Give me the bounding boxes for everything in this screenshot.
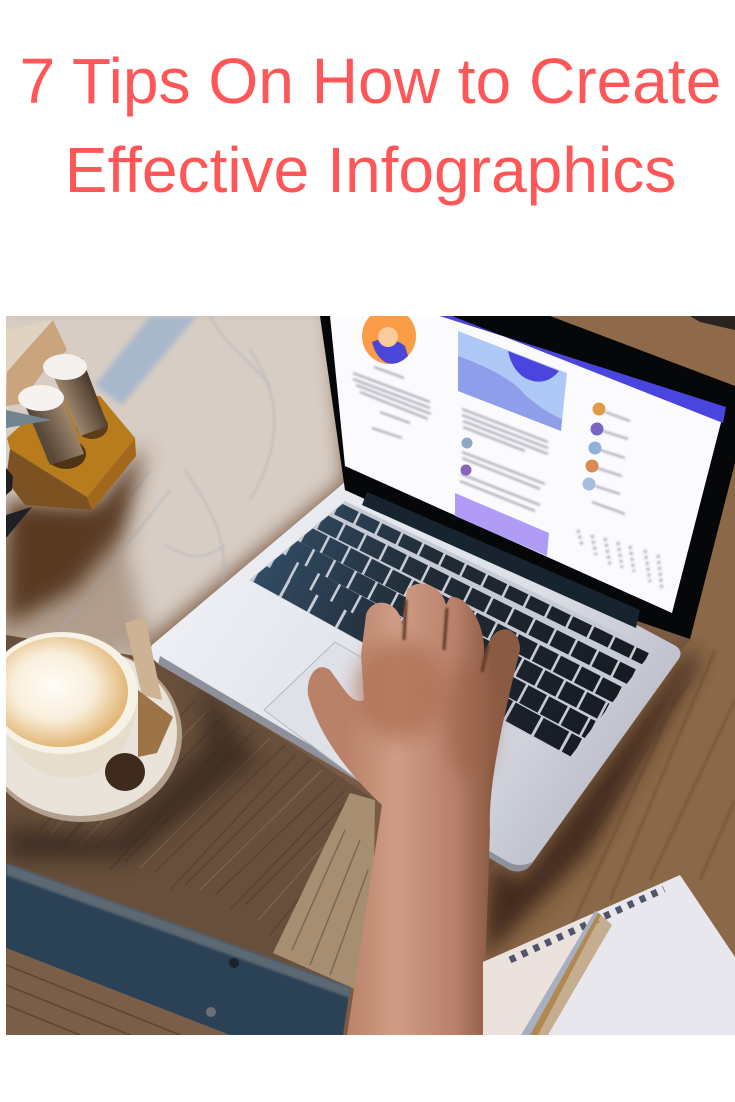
profile donut bbox=[362, 308, 416, 364]
title: 7 Tips On How to Create bbox=[20, 44, 721, 116]
sugar packets bbox=[125, 617, 162, 700]
finger gaps bbox=[404, 600, 488, 672]
spiral rings bbox=[510, 889, 664, 960]
spiral notebook bbox=[483, 875, 735, 1035]
dark metal table edge bbox=[6, 863, 350, 1035]
laptop screen lid bbox=[320, 308, 735, 639]
contact avatars bbox=[460, 402, 606, 490]
light oak strip bbox=[273, 793, 375, 998]
cup rim and foam bbox=[0, 632, 138, 754]
trackpad bbox=[264, 642, 400, 785]
keyboard bbox=[249, 501, 654, 758]
post image panel bbox=[458, 331, 567, 431]
lower wood board bbox=[6, 948, 230, 1035]
shadow beside laptop bbox=[483, 650, 700, 960]
wood grain on pale board bbox=[40, 316, 274, 630]
blurred interface text bbox=[353, 367, 630, 514]
title: Effective Infographics bbox=[65, 134, 676, 206]
title bbox=[20, 44, 721, 206]
pale wood board bbox=[0, 300, 345, 700]
purple top bar bbox=[440, 316, 726, 423]
shadow below holder bbox=[6, 445, 145, 625]
dark walnut panel bbox=[6, 635, 375, 987]
right-side wood bbox=[480, 460, 735, 962]
wooden pen holder with metal cylinders bbox=[6, 320, 136, 538]
blue grain streak bbox=[95, 316, 197, 405]
pen bbox=[535, 911, 612, 1035]
photo: hand typing on a laptop at a wooden table bbox=[6, 316, 735, 1035]
cup body bbox=[6, 680, 137, 778]
knuckle shading bbox=[355, 640, 445, 740]
table surface bbox=[0, 300, 735, 1035]
screen display bbox=[330, 308, 726, 613]
lavender panel bbox=[455, 493, 549, 556]
walnut grain bbox=[40, 690, 370, 935]
hand and arm bbox=[308, 584, 520, 1035]
shadow under saucer bbox=[6, 680, 260, 860]
chocolate bbox=[105, 753, 145, 791]
laptop base bbox=[150, 478, 681, 871]
coffee cup on saucer bbox=[0, 617, 182, 822]
